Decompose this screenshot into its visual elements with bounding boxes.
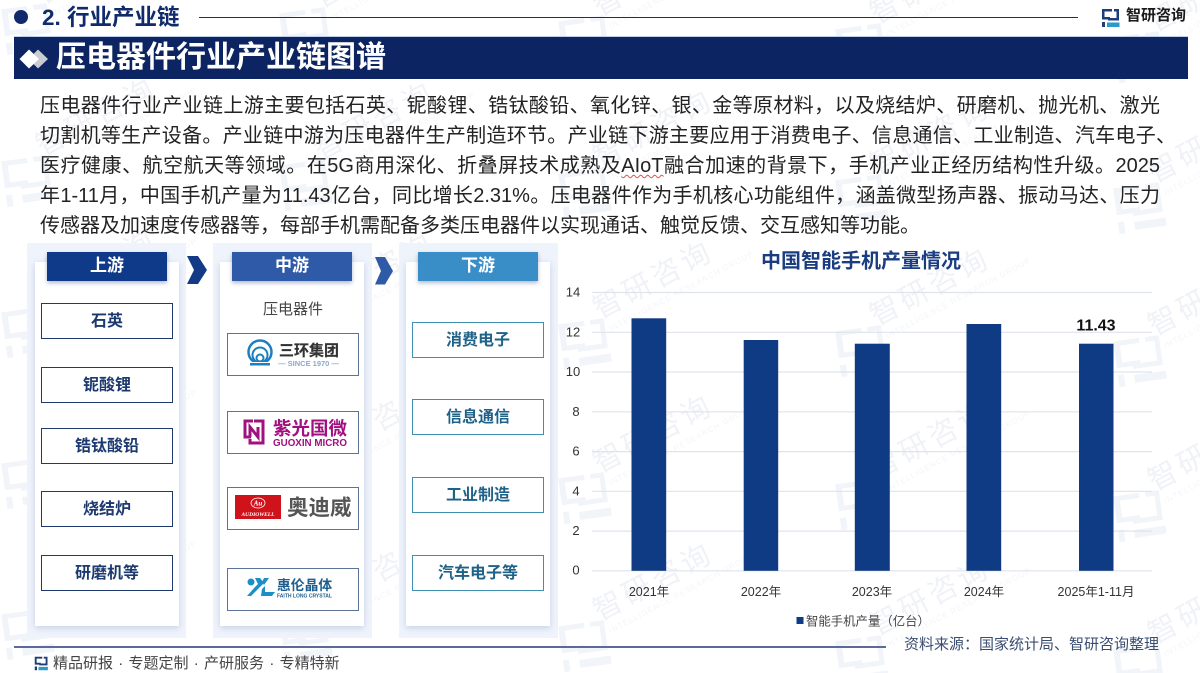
chart title: 中国智能手机产量情况 bbox=[761, 250, 961, 272]
intro paragraph bbox=[40, 94, 1176, 237]
arrow: midstream to downstream bbox=[375, 257, 393, 284]
y axis labels: 8 bbox=[572, 404, 580, 419]
footer rule bbox=[14, 646, 886, 648]
y axis labels: 12 bbox=[566, 324, 580, 340]
upstream header: 上游 bbox=[90, 256, 124, 275]
upstream item: 锆钛酸铅: 锆钛酸铅 bbox=[75, 438, 139, 455]
downstream header bbox=[418, 252, 538, 281]
brand logo bbox=[1102, 7, 1186, 27]
x axis labels: 2022年 bbox=[741, 585, 781, 599]
y axis labels: 14 bbox=[566, 284, 580, 300]
logo: 奥迪威: 奥迪威 bbox=[286, 496, 351, 520]
intro paragraph: 切割机等生产设备。产业链中游为压电器件生产制造环节。产业链下游主要应用于消费电子、信息通信、工业制造、汽车电子、 bbox=[40, 125, 1176, 147]
downstream item: 汽车电子等 bbox=[412, 555, 544, 591]
y axis labels: 4 bbox=[572, 484, 580, 498]
intro paragraph: 年1-11月，中国手机产量为11.43亿台，同比增长2.31%。压电器件作为手机核心功能组件，涵盖微型扬声器、振动马达、压力 bbox=[40, 185, 1160, 207]
intro paragraph: 传感器及加速度传感器等，每部手机需配备多类压电器件以实现通话、触觉反馈、交互感知等功能。 bbox=[40, 215, 920, 237]
upstream item: 铌酸锂 bbox=[41, 367, 173, 403]
logo: 奥迪威: AUDIOWELL bbox=[240, 512, 275, 518]
logo: 紫光国微 bbox=[227, 411, 359, 454]
banner title: 压电器件行业产业链图谱 bbox=[56, 41, 386, 74]
x axis labels: 2024年 bbox=[964, 585, 1004, 599]
bar chart bbox=[566, 250, 1152, 628]
downstream item: 信息通信: 信息通信 bbox=[446, 409, 510, 426]
x axis labels: 2023年 bbox=[852, 585, 892, 599]
midstream header: 中游 bbox=[275, 256, 309, 275]
x axis labels: 2021年 bbox=[629, 585, 669, 599]
logo: 惠伦晶体: 惠伦晶体 bbox=[276, 576, 332, 592]
logo: 三环集团: 三环集团 bbox=[278, 341, 339, 359]
y axis labels: 2 bbox=[572, 523, 580, 538]
midstream subtitle: 压电器件 bbox=[263, 301, 323, 318]
downstream header: 下游 bbox=[461, 256, 495, 275]
data label: 11.43 bbox=[1076, 318, 1116, 334]
downstream item: 消费电子: 消费电子 bbox=[446, 332, 510, 349]
brand logo: 智研咨询 bbox=[1126, 7, 1186, 24]
midstream header bbox=[232, 252, 352, 281]
downstream item: 信息通信 bbox=[412, 399, 544, 435]
title banner bbox=[14, 37, 1188, 79]
footer tagline: 精品研报 · 专题定制 · 产研服务 · 专精特新 bbox=[53, 655, 340, 672]
intro paragraph: 医疗健康、航空航天等领域。在5G商用深化、折叠屏技术成熟及AIoT融合加速的背景下，手机产业正经历结构性升级。2025 bbox=[40, 155, 1160, 177]
downstream item: 工业制造: 工业制造 bbox=[446, 487, 510, 504]
upstream item: 研磨机等: 研磨机等 bbox=[75, 565, 139, 582]
logo: 三环集团: — SINCE 1970 — bbox=[278, 358, 339, 368]
logo: 奥迪威 bbox=[227, 487, 359, 530]
upstream item: 铌酸锂: 铌酸锂 bbox=[83, 377, 131, 394]
x axis labels: 2025年1-11月 bbox=[1058, 585, 1134, 599]
bars bbox=[632, 318, 1114, 571]
logo: 紫光国微: 紫光国微 bbox=[272, 418, 347, 438]
y axis labels: 6 bbox=[572, 444, 580, 458]
panel: downstream bbox=[399, 243, 558, 638]
icon: diamonds bbox=[20, 50, 48, 68]
upstream item: 烧结炉 bbox=[41, 491, 173, 527]
logo: 惠伦晶体 bbox=[227, 568, 359, 611]
arrow: upstream to midstream bbox=[187, 256, 207, 284]
panel: midstream bbox=[213, 243, 372, 638]
downstream item: 消费电子 bbox=[412, 322, 544, 358]
y axis labels bbox=[566, 284, 580, 578]
y axis labels: 0 bbox=[572, 562, 580, 578]
downstream item: 汽车电子等: 汽车电子等 bbox=[438, 565, 518, 582]
upstream item: 烧结炉: 烧结炉 bbox=[83, 501, 131, 518]
upstream item: 石英: 石英 bbox=[91, 313, 123, 330]
upstream item: 石英 bbox=[41, 303, 173, 339]
source note: 资料来源：国家统计局、智研咨询整理 bbox=[904, 636, 1159, 653]
upstream item: 锆钛酸铅 bbox=[41, 428, 173, 464]
intro paragraph: 压电器件行业产业链上游主要包括石英、铌酸锂、锆钛酸铅、氧化锌、银、金等原材料，以及烧结炉、研磨机、抛光机、激光 bbox=[40, 95, 1160, 117]
logo: 奥迪威: Au bbox=[252, 499, 262, 507]
logo: 惠伦晶体: FAITH LONG CRYSTAL bbox=[276, 593, 332, 599]
icon: footer logo bbox=[34, 656, 48, 670]
x axis labels bbox=[629, 585, 1134, 599]
upstream header bbox=[47, 252, 167, 281]
downstream item: 工业制造 bbox=[412, 477, 544, 513]
upstream item: 研磨机等 bbox=[41, 555, 173, 591]
logo: 紫光国微: GUOXIN MICRO bbox=[272, 436, 346, 448]
logo: 三环集团 bbox=[227, 333, 359, 376]
section heading: 2. 行业产业链 bbox=[42, 5, 180, 30]
y axis labels: 10 bbox=[566, 364, 580, 379]
legend: 智能手机产量（亿台） bbox=[806, 614, 930, 628]
panel: upstream bbox=[27, 243, 186, 638]
